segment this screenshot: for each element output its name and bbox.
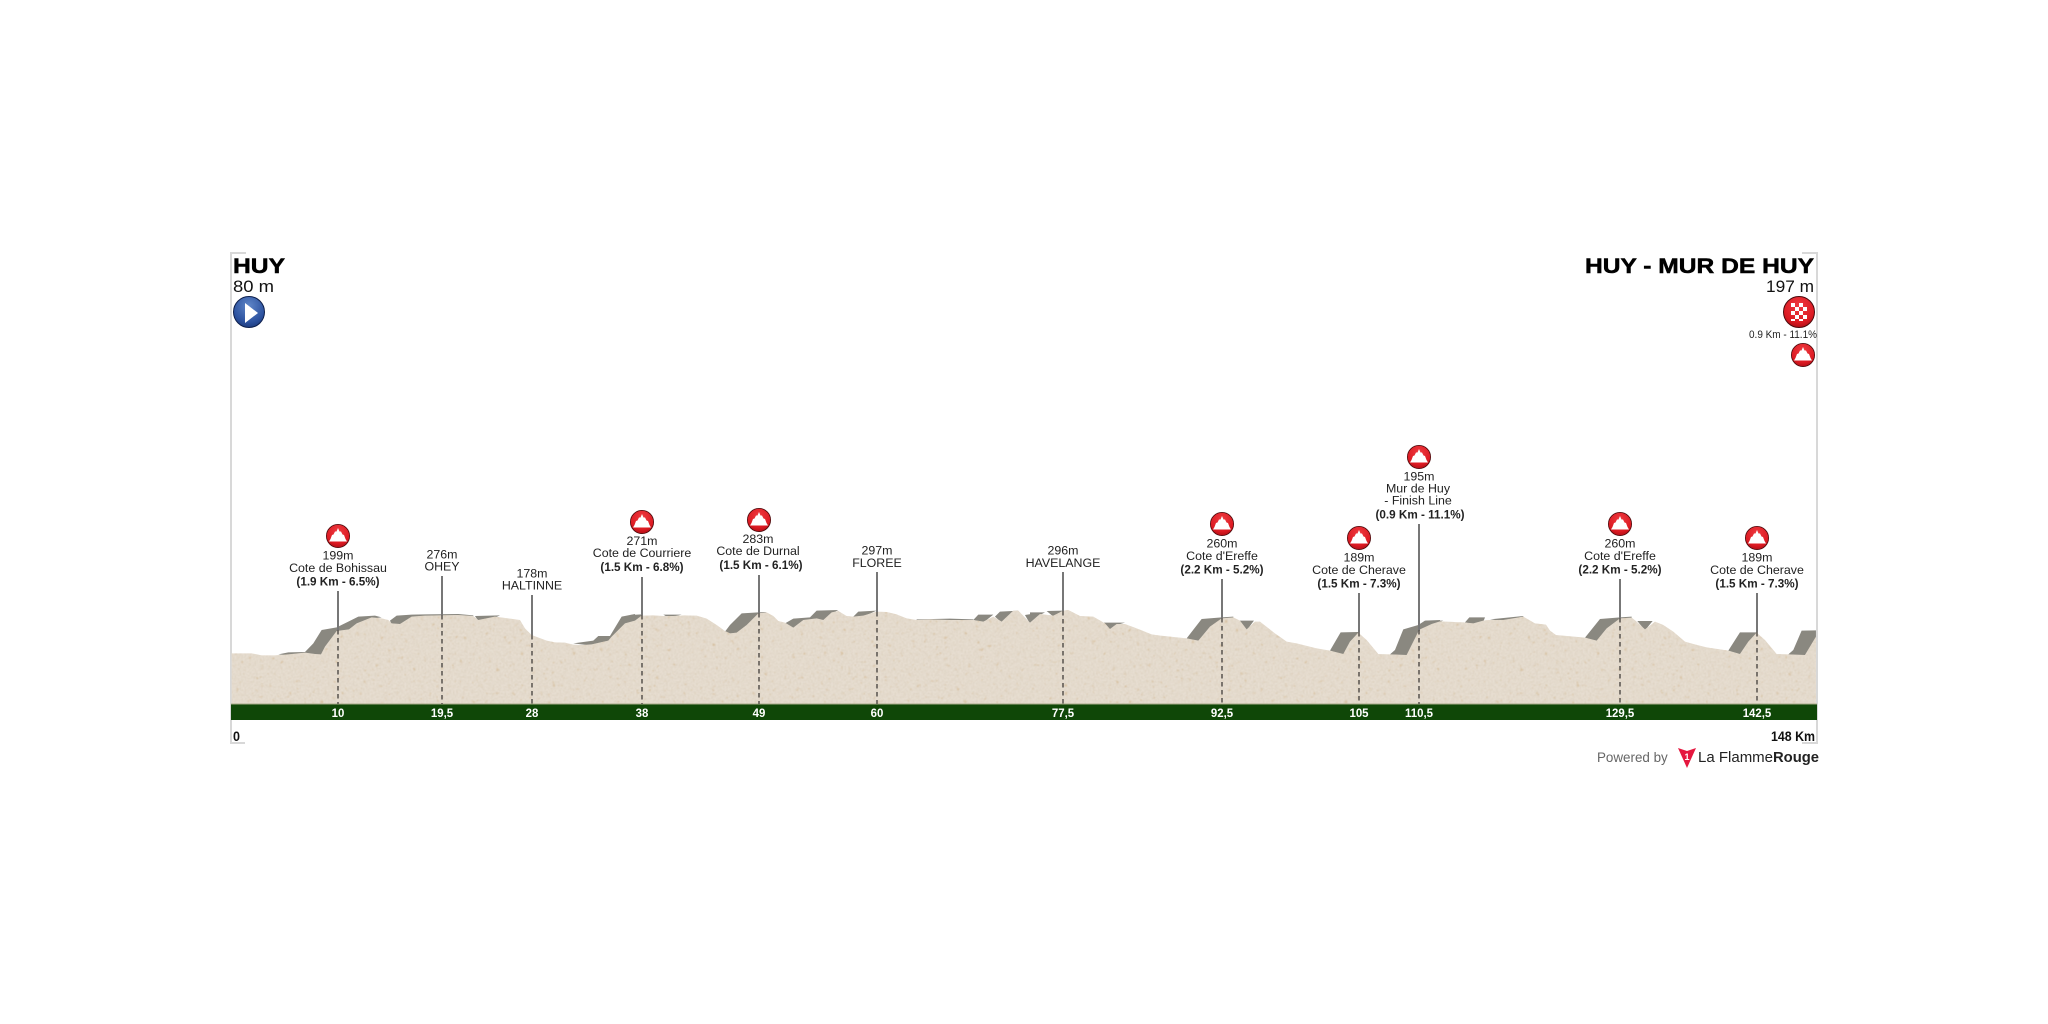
marker: Cote d'Ereffe km 92,5: (2.2 Km - 5.2%) [1180, 564, 1264, 576]
finish climb note: 0.9 Km - 11.1% [1749, 329, 1817, 341]
marker: FLOREE km 60: 297m [862, 544, 892, 558]
logo: La Flamme Rouge [1678, 748, 1819, 768]
start title: HUY: HUY [233, 254, 285, 278]
marker: Cote de Courriere km 38: Cote de Courriere [593, 546, 691, 560]
marker: Mur de Huy km 110,5: 195m [1404, 470, 1434, 484]
marker: Cote d'Ereffe km 92,5: 260m [1206, 537, 1238, 551]
marker: Cote de Cherave km 105: 189m [1344, 551, 1374, 565]
marker: Cote d'Ereffe km 129,5 [1578, 512, 1662, 704]
finish title: HUY - MUR DE HUY: HUY - MUR DE HUY [1585, 254, 1814, 278]
kilometre labels: 49 [753, 706, 766, 720]
kilometre labels: 60 [871, 706, 884, 720]
marker: Cote de Cherave km 142,5: Cote de Cherave [1710, 563, 1804, 577]
elevation profile [232, 610, 1816, 704]
marker: Cote de Cherave km 142,5 [1710, 526, 1804, 704]
climb shading [278, 610, 1816, 656]
marker: OHEY km 19,5 [424, 548, 460, 704]
icon: finish climb [1791, 343, 1815, 367]
kilometre labels: 10 [332, 706, 345, 720]
marker: Cote de Durnal km 49: (1.5 Km - 6.1%) [719, 559, 803, 572]
marker: FLOREE km 60: FLOREE [852, 556, 902, 570]
marker: Cote de Bohissau km 10: Cote de Bohissau [289, 561, 387, 575]
marker: Cote de Courriere km 38 [593, 510, 691, 704]
kilometre labels: 28 [526, 706, 539, 720]
finish title: HUY - MUR DE HUY [1585, 254, 1814, 296]
marker: FLOREE km 60 [852, 544, 902, 704]
kilometre labels: 110,5 [1405, 706, 1433, 720]
marker: Cote d'Ereffe km 92,5: Cote d'Ereffe [1186, 549, 1258, 563]
total distance: 148 Km [1771, 728, 1815, 744]
marker: Cote d'Ereffe km 129,5: 260m [1604, 537, 1636, 551]
start title: HUY [233, 254, 285, 296]
kilometre labels: 129,5 [1606, 706, 1635, 720]
marker: HAVELANGE km 77,5 [1026, 544, 1100, 704]
marker: Cote de Cherave km 105 [1312, 526, 1406, 704]
marker: Cote de Durnal km 49: 283m [742, 532, 774, 546]
marker: Cote d'Ereffe km 129,5: (2.2 Km - 5.2%) [1578, 564, 1662, 576]
kilometre labels [332, 706, 1772, 720]
marker: Cote de Bohissau km 10: (1.9 Km - 6.5%) [296, 576, 380, 588]
kilometre labels: 142,5 [1743, 706, 1772, 720]
distance bar [231, 704, 1817, 720]
kilometre labels: 92,5 [1211, 706, 1233, 720]
logo: La Flamme Rouge: Rouge [1773, 750, 1819, 766]
marker: Cote de Cherave km 142,5: (1.5 Km - 7.3%) [1715, 578, 1799, 590]
marker: Cote de Cherave km 105: (1.5 Km - 7.3%) [1317, 578, 1401, 590]
icon: finish checker [1784, 296, 1814, 328]
marker: Cote de Cherave km 105: Cote de Cherave [1312, 563, 1406, 577]
logo: La Flamme Rouge: La Flamme [1698, 749, 1773, 766]
logo: La Flamme Rouge: 1 [1684, 752, 1690, 762]
marker: Mur de Huy km 110,5: Mur de Huy [1386, 482, 1451, 496]
marker: Cote de Bohissau km 10 [289, 524, 387, 704]
marker: Cote de Cherave km 142,5: 189m [1742, 551, 1772, 565]
kilometre labels: 38 [636, 706, 649, 720]
powered by: Powered by [1597, 750, 1668, 765]
kilometre labels: 77,5 [1052, 706, 1074, 720]
kilometre labels: 105 [1349, 706, 1369, 720]
icon: start arrow [234, 296, 264, 328]
marker: Mur de Huy km 110,5 [1376, 445, 1465, 704]
start title: HUY: 80 m [233, 278, 274, 296]
marker: Cote de Durnal km 49: Cote de Durnal [716, 544, 800, 558]
marker: HAVELANGE km 77,5: HAVELANGE [1026, 556, 1100, 570]
marker: OHEY km 19,5: OHEY [424, 560, 460, 574]
marker: HAVELANGE km 77,5: 296m [1048, 544, 1078, 558]
marker: Cote de Durnal km 49 [716, 508, 803, 704]
marker: Cote de Courriere km 38: (1.5 Km - 6.8%) [600, 561, 684, 574]
marker: Mur de Huy km 110,5: (0.9 Km - 11.1%) [1376, 508, 1465, 521]
marker: Mur de Huy km 110,5: - Finish Line [1384, 494, 1452, 508]
start distance: 0 [233, 728, 240, 744]
marker: HALTINNE km 28: 178m [516, 566, 548, 580]
kilometre labels: 19,5 [431, 706, 453, 720]
marker: Cote de Bohissau km 10: 199m [322, 548, 354, 562]
textured terrain [232, 610, 1816, 704]
finish title: HUY - MUR DE HUY: 197 m [1766, 278, 1814, 296]
marker: Cote d'Ereffe km 129,5: Cote d'Ereffe [1584, 549, 1656, 563]
marker: Cote de Courriere km 38: 271m [626, 534, 658, 548]
marker: OHEY km 19,5: 276m [426, 548, 458, 562]
marker: Cote d'Ereffe km 92,5 [1180, 512, 1264, 704]
marker: HALTINNE km 28: HALTINNE [502, 579, 562, 593]
chart frame [231, 253, 1817, 743]
marker: HALTINNE km 28 [502, 566, 562, 704]
